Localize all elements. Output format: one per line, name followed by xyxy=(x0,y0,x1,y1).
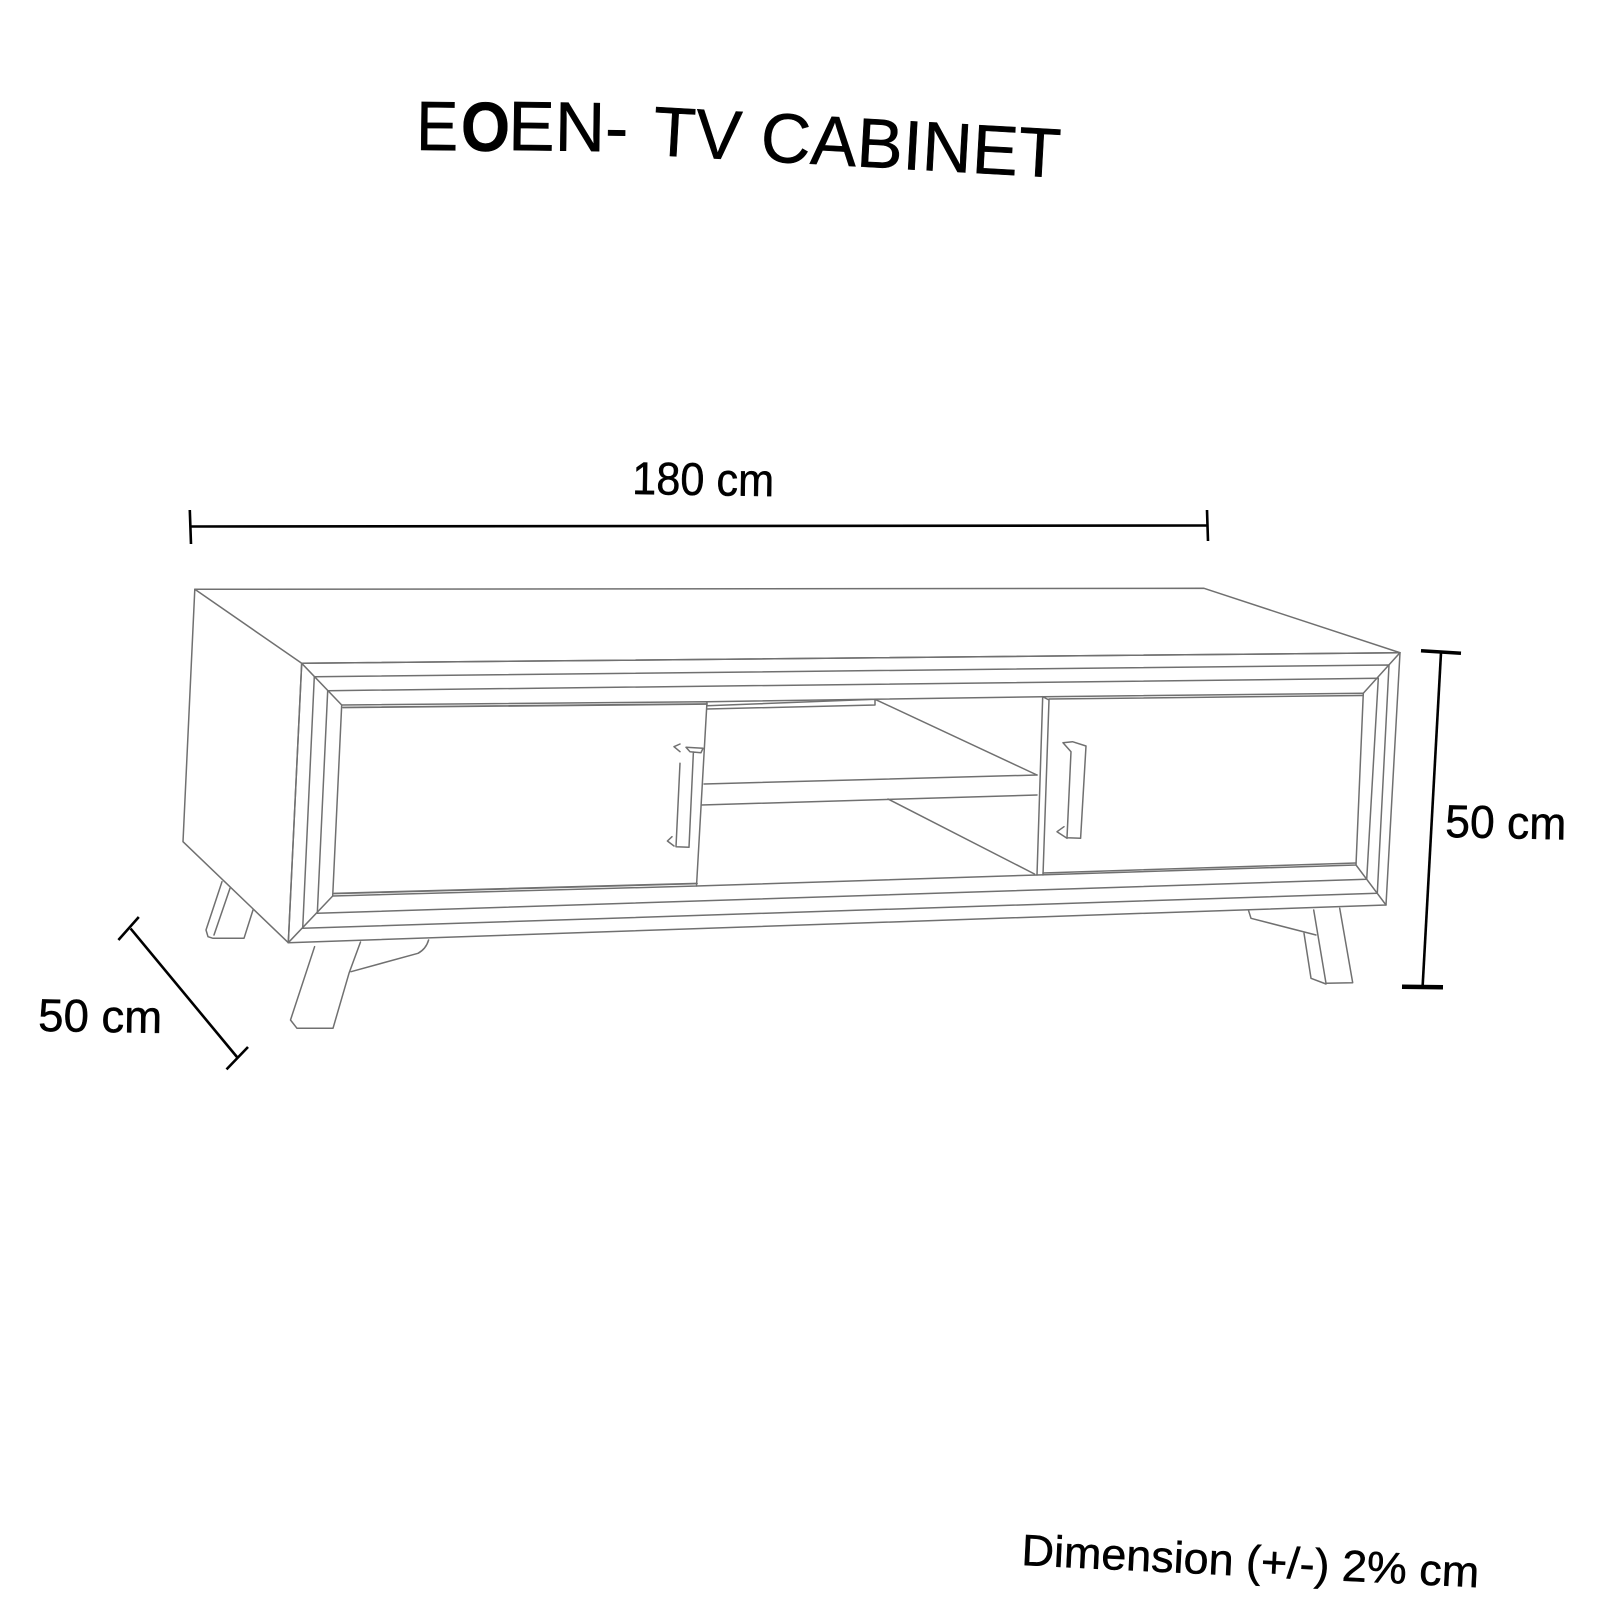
title: TV CABINET xyxy=(651,92,1063,193)
title xyxy=(416,87,1063,193)
width dimension line xyxy=(190,510,1208,544)
depth dimension line xyxy=(118,917,248,1069)
title: O xyxy=(461,88,510,166)
back left leg xyxy=(206,882,253,938)
front left leg xyxy=(290,940,429,1028)
left door xyxy=(333,702,707,896)
right door xyxy=(1037,693,1363,875)
right door handle xyxy=(1057,742,1086,838)
cabinet drawing xyxy=(183,588,1400,1028)
depth dimension label: 50 cm xyxy=(38,989,163,1043)
width dimension label: 180 cm xyxy=(632,452,775,506)
height dimension label: 50 cm xyxy=(1445,795,1567,850)
cabinet top and side xyxy=(183,588,1400,943)
title: E xyxy=(416,87,459,165)
height dimension line xyxy=(1402,651,1461,987)
cabinet front frame xyxy=(288,653,1400,943)
front right leg xyxy=(1249,908,1353,984)
tolerance note: Dimension (+/-) 2% cm xyxy=(1021,1526,1480,1597)
open shelf compartment xyxy=(696,697,1043,886)
title: EN- xyxy=(508,87,629,167)
left door handle xyxy=(667,744,703,847)
